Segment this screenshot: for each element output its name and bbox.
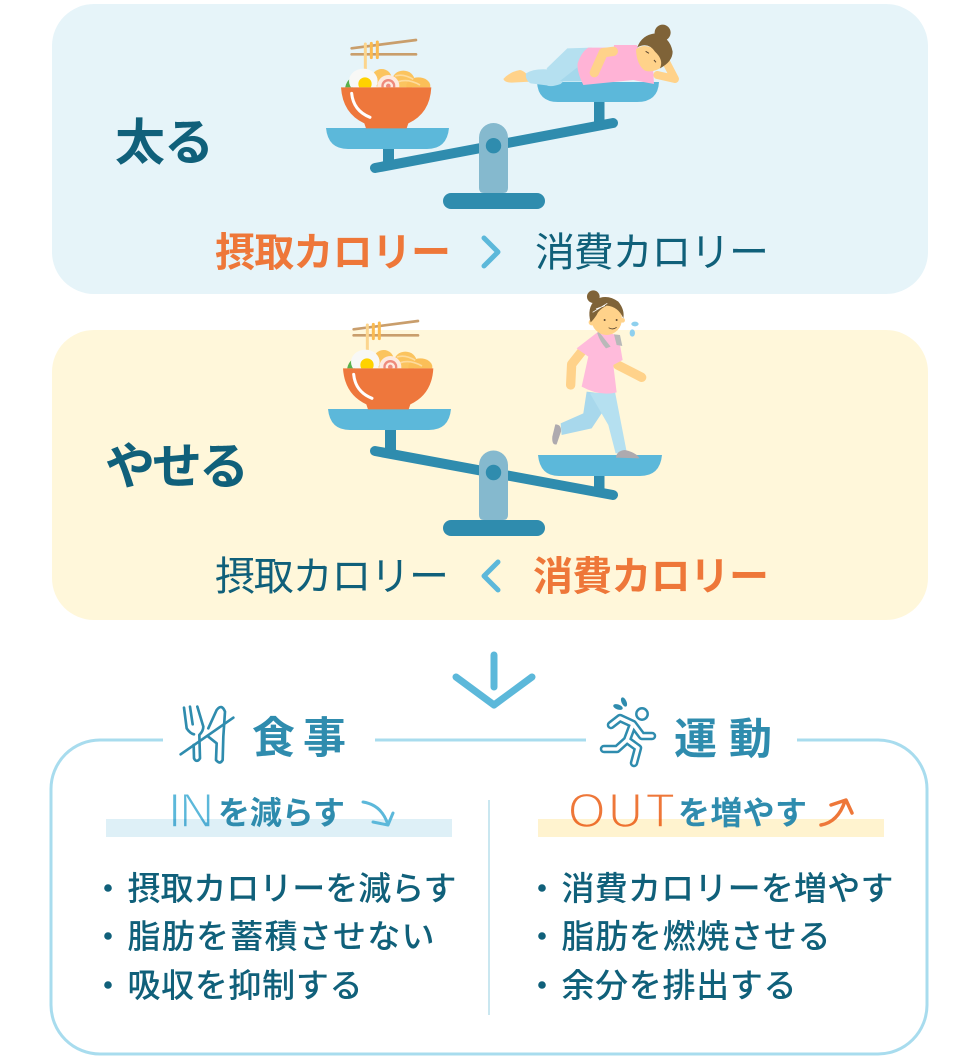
scale: tilted with food side down (326, 82, 659, 209)
icon: running figure (604, 696, 652, 763)
icon: fork and knife crossed out (181, 707, 233, 762)
arrow: trending down (363, 802, 393, 825)
subheading panel: OUTを増やす: を増やす (678, 795, 807, 831)
list: 食事 points: 吸収を抑制する (128, 967, 362, 1004)
comparison: 摂取カロリー < 消費カロリー (215, 555, 769, 599)
list: 運動 points (538, 870, 894, 1004)
illustration: ramen bowl (343, 321, 433, 409)
subheading panel: INを減らす: を減らす (218, 795, 345, 831)
comparison: 摂取カロリー > 消費カロリー: 消費カロリー (535, 231, 769, 275)
comparison: 摂取カロリー < 消費カロリー: 摂取カロリー (215, 555, 449, 599)
illustration: ramen bowl (341, 40, 431, 128)
comparison: 摂取カロリー > 消費カロリー (215, 231, 769, 275)
panel: 太る (52, 4, 928, 294)
list: 食事 points: 摂取カロリーを減らす (128, 870, 456, 907)
list: 食事 points (104, 870, 456, 1004)
panel: 食事 and 運動 (51, 696, 927, 1054)
list: 運動 points: 消費カロリーを増やす (562, 870, 894, 907)
illustration: woman lying down (503, 25, 675, 86)
list: 運動 points: 余分を排出する (562, 967, 796, 1004)
arrow: trending up (821, 800, 852, 825)
comparison: 摂取カロリー < 消費カロリー: 消費カロリー (533, 555, 769, 599)
subheading panel: INを減らす (106, 785, 452, 838)
comparison: 摂取カロリー > 消費カロリー: 摂取カロリー (215, 231, 451, 275)
subheading panel: OUTを増やす: OUT (568, 785, 675, 838)
subheading panel: INを減らす: IN (168, 785, 214, 838)
scale: tilted with exercise side down (328, 409, 662, 536)
panel: やせる (52, 290, 928, 620)
arrow: down (456, 655, 532, 705)
list: 食事 points: 脂肪を蓄積させない (128, 918, 434, 955)
heading: やせる: やせる (105, 439, 249, 495)
illustration: woman running (552, 290, 642, 458)
subheading panel: OUTを増やす (538, 785, 884, 838)
heading: 食事: 食事 (252, 715, 346, 763)
heading: 運動: 運動 (674, 716, 772, 764)
heading: 太る: 太る (115, 115, 214, 171)
list: 運動 points: 脂肪を燃焼させる (562, 918, 830, 955)
